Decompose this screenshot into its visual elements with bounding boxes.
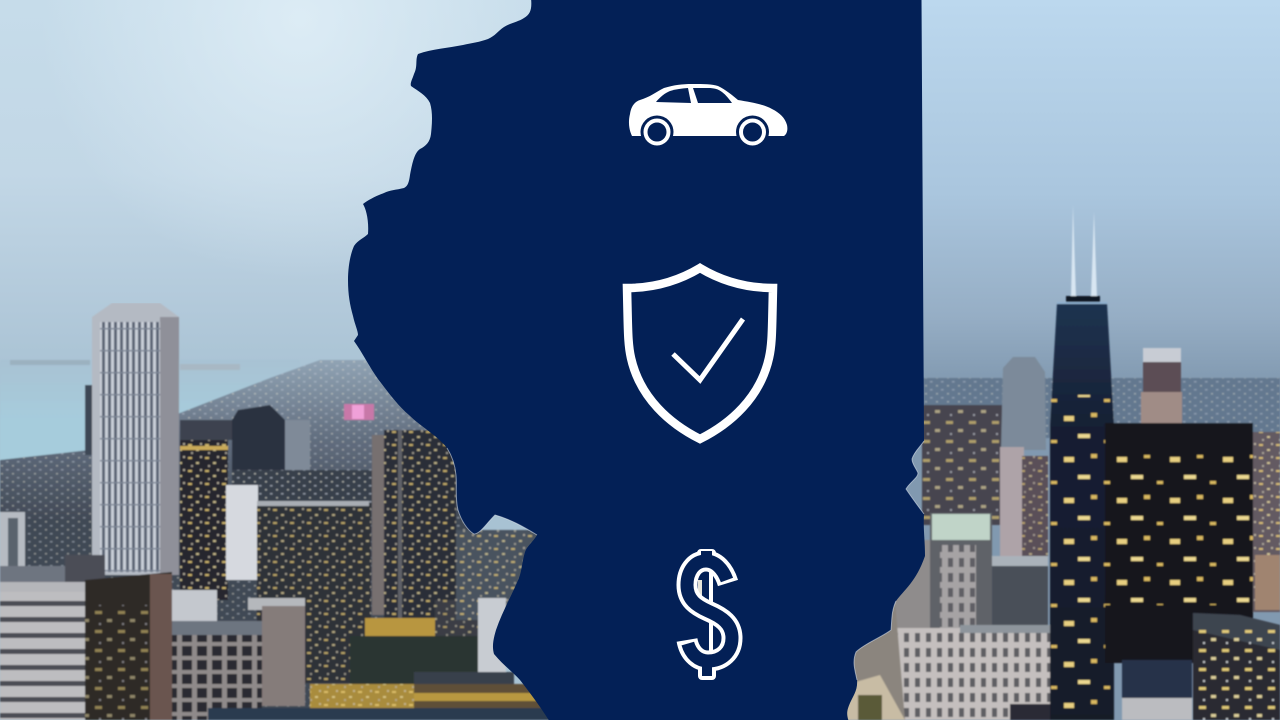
John Hancock antennas: [1071, 205, 1097, 297]
icon: dollar sign: [687, 551, 732, 678]
icon: car: [629, 84, 787, 148]
icon: shield with check mark: [627, 268, 773, 439]
background photo: Chicago skyline left: [0, 303, 553, 720]
state silhouette: Illinois: [348, 0, 925, 720]
background photo: Chicago skyline right: [845, 205, 1280, 720]
background photo: left sky: [0, 0, 640, 720]
lower-edge light halo on the silhouette: [447, 441, 924, 680]
background photo: right sky: [640, 0, 1280, 720]
